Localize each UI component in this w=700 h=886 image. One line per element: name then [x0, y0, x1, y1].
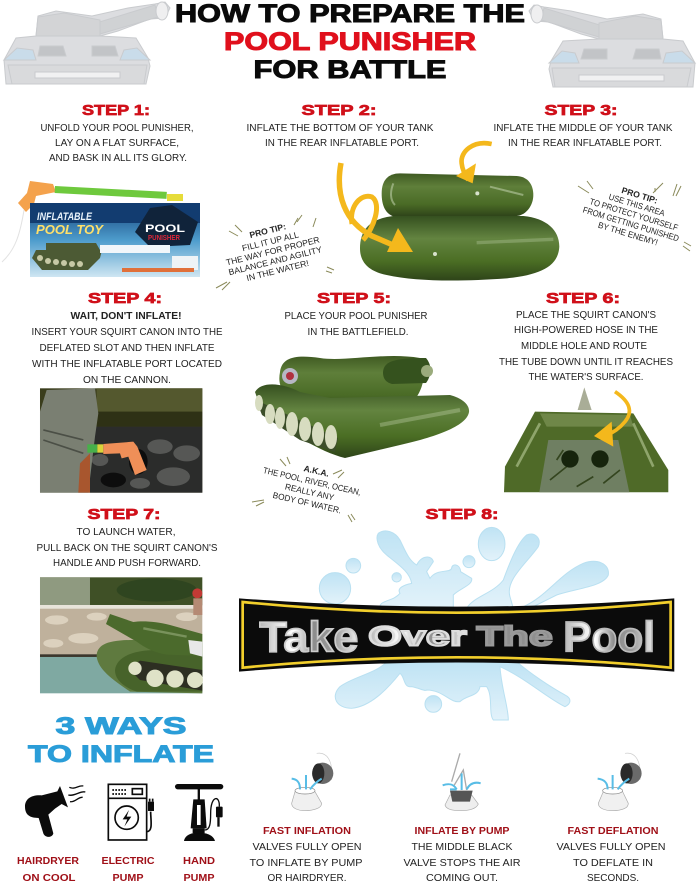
panel: step 4: STEP 4:	[88, 291, 162, 307]
text: fast inflation: TO INFLATE BY PUMP	[250, 857, 362, 869]
icon: valve fast deflation	[598, 753, 642, 811]
panel: step 2	[246, 103, 434, 149]
icon: valve fast inflation	[292, 753, 333, 811]
text: inflate by pump: COMING OUT.	[426, 872, 498, 884]
callout: a.k.a. battlefield note: BODY OF WATER.	[272, 490, 342, 515]
callout: a.k.a. battlefield note: A.K.A.	[303, 463, 330, 479]
illustration: inflated tank base	[360, 173, 559, 281]
heading: 3 ways to inflate	[28, 713, 214, 768]
panel: step 4: DEFLATED SLOT AND THEN INFLATE	[40, 342, 214, 354]
heading: 3 ways to inflate: 3 WAYS	[56, 713, 186, 740]
text: fast deflation: VALVES FULLY OPEN	[556, 841, 666, 853]
panel: step 3: STEP 3:	[544, 103, 618, 119]
panel: step 6	[499, 291, 673, 383]
callout: pro tip fill it up: IN THE WATER!	[245, 258, 310, 283]
arrow: yellow arrow to bottom port	[339, 163, 413, 252]
callout: pro tip fill it up: BALANCE AND AGILITY	[227, 244, 323, 277]
panel: step 4: WAIT, DON'T INFLATE!	[70, 310, 182, 322]
icon: tank right	[529, 5, 695, 87]
banner: take over the pool: The	[477, 621, 553, 652]
panel: step 1: STEP 1:	[82, 103, 150, 119]
panel: step 7: TO LAUNCH WATER,	[76, 526, 176, 538]
arrow: yellow arrow to middle hole	[594, 392, 629, 447]
panel: step 5: PLACE YOUR POOL PUNISHER	[284, 310, 428, 322]
icon: hairdryer	[25, 786, 85, 837]
text: fast inflation: OR HAIRDRYER.	[268, 872, 346, 884]
labels: inflation methods: ON COOL	[22, 872, 76, 884]
text: inflate by pump: THE MIDDLE BLACK	[412, 841, 512, 853]
photo: inflated tank on white	[255, 356, 469, 458]
banner: take over the pool: Pool	[563, 614, 655, 662]
panel: step 4: ON THE CANNON.	[83, 374, 171, 386]
text: fast inflation: VALVES FULLY OPEN	[252, 841, 362, 853]
title: FOR BATTLE	[254, 56, 446, 84]
banner: take over the pool: Over	[368, 621, 467, 652]
callout: pro tip protect yourself: PRO TIP:	[620, 185, 659, 206]
banner: take over the pool	[239, 598, 674, 672]
panel: step 5: STEP 5:	[317, 291, 391, 307]
text: fast inflation: FAST INFLATION	[263, 825, 351, 837]
panel: step 4	[32, 291, 222, 386]
illustration: water splash	[319, 527, 608, 720]
panel: step 6: MIDDLE HOLE AND ROUTE	[521, 340, 647, 352]
panel: step 3: INFLATE THE MIDDLE OF YOUR TANK	[494, 122, 672, 134]
text: fast deflation: FAST DEFLATION	[568, 825, 658, 837]
panel: step 8 heading: STEP 8:	[426, 507, 498, 523]
panel: step 2: STEP 2:	[302, 103, 376, 119]
panel: step 6: THE WATER'S SURFACE.	[528, 371, 644, 383]
photo: tank launching water by the pool	[40, 577, 203, 693]
panel: step 4: WITH THE INFLATABLE PORT LOCATED	[32, 358, 222, 370]
icon: squirt cannon and product box	[2, 181, 200, 277]
panel: step 5	[284, 291, 428, 338]
panel: step 2: INFLATE THE BOTTOM OF YOUR TANK	[246, 122, 434, 134]
panel: step 2: IN THE REAR INFLATABLE PORT.	[265, 137, 419, 149]
heading: 3 ways to inflate: TO INFLATE	[28, 741, 214, 768]
callout: pro tip protect yourself: TO PROTECT YOURSELF	[588, 196, 679, 233]
banner: take over the pool: Take	[259, 614, 358, 662]
panel: step 4: INSERT YOUR SQUIRT CANON INTO THE	[32, 326, 222, 338]
panel: step 6: PLACE THE SQUIRT CANON'S	[516, 309, 656, 321]
icon: squirt cannon and product box: INFLATABLE	[37, 211, 93, 223]
callout: pro tip protect yourself	[578, 176, 691, 253]
labels: inflation methods	[17, 855, 215, 884]
callout: pro tip fill it up: THE WAY FOR PROPER	[225, 235, 321, 267]
callout: pro tip fill it up	[216, 214, 334, 290]
callout: a.k.a. battlefield note: REALLY ANY	[284, 481, 335, 502]
labels: inflation methods: HAIRDRYER	[17, 855, 79, 867]
title: HOW TO PREPARE THE	[175, 0, 525, 28]
labels: inflation methods: PUMP	[184, 872, 214, 884]
icon: squirt cannon and product box: PUNISHER	[148, 235, 180, 242]
panel: step 5: IN THE BATTLEFIELD.	[308, 326, 408, 338]
callout: pro tip fill it up: PRO TIP:	[248, 221, 287, 240]
labels: inflation methods: HAND	[183, 855, 215, 867]
panel: step 3	[494, 103, 672, 149]
labels: inflation methods: ELECTRIC	[102, 855, 155, 867]
text: inflate by pump: INFLATE BY PUMP	[414, 825, 510, 837]
text: fast deflation	[556, 825, 666, 884]
arrow: yellow arrow to middle port	[456, 143, 492, 183]
text: fast deflation: SECONDS.	[587, 872, 639, 884]
icon: valve inflate by pump	[443, 753, 481, 811]
photo: squirt cannon in slot	[40, 388, 202, 493]
callout: a.k.a. battlefield note	[252, 454, 364, 522]
panel: step 1: UNFOLD YOUR POOL PUNISHER,	[40, 122, 194, 134]
callout: pro tip protect yourself: BY THE ENEMY!	[597, 220, 659, 247]
title	[175, 0, 525, 84]
labels: inflation methods: PUMP	[112, 872, 144, 884]
callout: pro tip protect yourself: USE THIS AREA	[608, 192, 666, 218]
callout: a.k.a. battlefield note: THE POOL, RIVER, OCEAN,	[262, 465, 362, 497]
title: POOL PUNISHER	[224, 28, 476, 56]
panel: step 7: STEP 7:	[88, 507, 160, 523]
panel: step 6: HIGH-POWERED HOSE IN THE	[514, 324, 658, 336]
panel: step 7: PULL BACK ON THE SQUIRT CANON'S	[36, 542, 218, 554]
photo: hose routed through middle hole	[504, 387, 668, 492]
callout: pro tip protect yourself: FROM GETTING PUNISHED	[582, 205, 680, 243]
panel: step 3: IN THE REAR INFLATABLE PORT.	[508, 137, 662, 149]
panel: step 1	[40, 103, 194, 164]
panel: step 7: HANDLE AND PUSH FORWARD.	[53, 557, 201, 569]
icon: tank left	[4, 2, 170, 84]
text: fast deflation: TO DEFLATE IN	[573, 857, 653, 869]
text: inflate by pump	[404, 825, 521, 884]
icon: electric pump	[108, 784, 154, 840]
icon: squirt cannon and product box: POOL	[145, 223, 185, 235]
text: fast inflation	[250, 825, 362, 884]
icon: squirt cannon and product box: POOL TOY	[36, 222, 104, 237]
panel: step 6: STEP 6:	[546, 291, 620, 307]
panel: step 1: LAY ON A FLAT SURFACE,	[55, 137, 179, 149]
panel: step 6: THE TUBE DOWN UNTIL IT REACHES	[499, 356, 673, 368]
panel: step 7	[36, 507, 218, 569]
panel: step 1: AND BASK IN ALL ITS GLORY.	[49, 152, 187, 164]
callout: pro tip fill it up: FILL IT UP ALL	[241, 229, 300, 253]
text: inflate by pump: VALVE STOPS THE AIR	[404, 857, 521, 869]
icon: hand pump	[175, 784, 223, 841]
